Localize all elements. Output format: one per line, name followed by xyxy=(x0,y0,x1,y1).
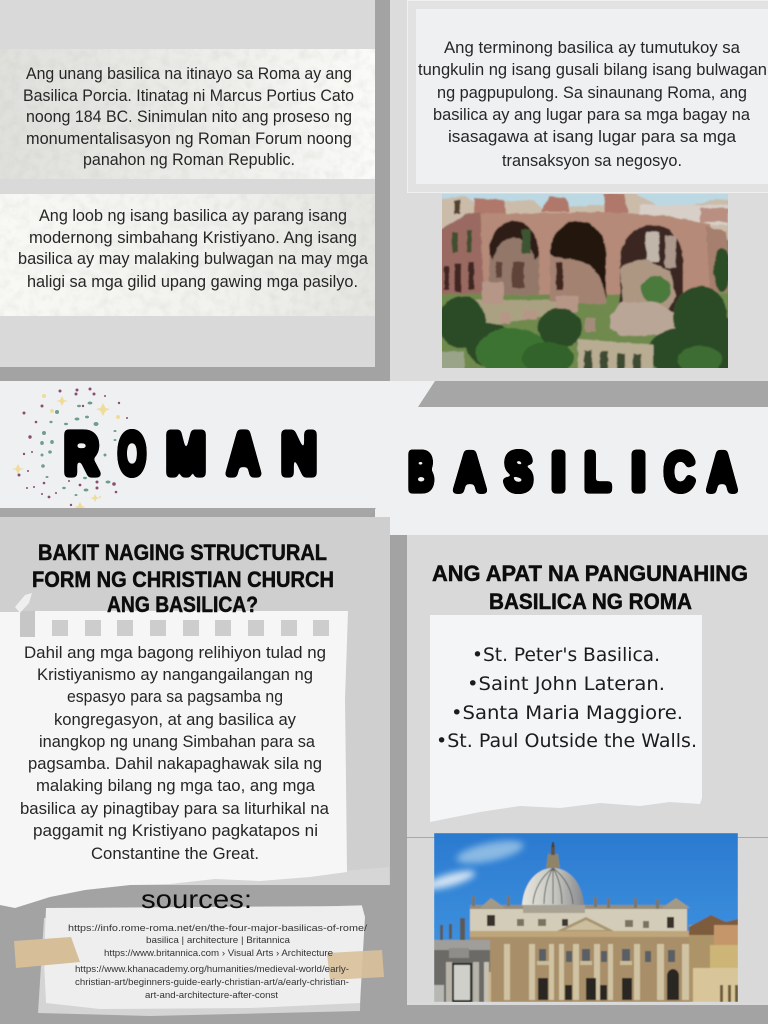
text: basilica interior xyxy=(18,207,369,291)
title: BASILICA: C xyxy=(664,440,695,502)
trees xyxy=(442,284,728,368)
title: BASILICA: A xyxy=(707,440,737,502)
text: source links: christian-art/beginners-guide-early-christian-art/a/early-christian- xyxy=(75,977,349,988)
text: list of four basilicas: •St. Peter's Basilica. xyxy=(472,644,660,666)
title: BASILICA: I xyxy=(551,440,566,502)
title: ROMAN xyxy=(64,421,317,487)
panel: parallelogram accent xyxy=(418,381,768,407)
text: why the basilica became the church form: espasyo para sa pagsamba ng xyxy=(67,688,283,706)
heading: why basilica: FORM NG CHRISTIAN CHURCH xyxy=(32,567,334,592)
decoration: confetti burst xyxy=(12,388,128,508)
tape left xyxy=(14,937,80,968)
text: why the basilica became the church form: malaking bilang ng mga tao, ang mga xyxy=(36,777,316,795)
dome xyxy=(522,868,584,905)
arch three xyxy=(620,225,683,314)
title: BASILICA: S xyxy=(504,440,533,502)
heading: four major basilicas: ANG APAT NA PANGUNAHING xyxy=(432,561,748,586)
title: ROMAN: O xyxy=(118,421,146,487)
text: why the basilica became the church form: kongregasyon, at ang basilica ay xyxy=(54,711,297,729)
arch two xyxy=(550,222,606,304)
title: BASILICA: I xyxy=(631,440,646,502)
text: definition of basilica: Ang terminong basilica ay tumutukoy sa xyxy=(444,39,741,57)
text: basilica interior: modernong simbahang Kristiyano. Ang isang xyxy=(29,229,357,247)
text: why the basilica became the church form xyxy=(20,644,330,863)
photo: St. Peter's Basilica xyxy=(423,833,738,1002)
right buildings xyxy=(688,924,715,1002)
text: definition of basilica: transaksyon sa negosyo. xyxy=(502,152,682,170)
text: why the basilica became the church form: Dahil ang mga bagong relihiyon tulad ng xyxy=(24,644,326,662)
text: why the basilica became the church form: Kristiyanismo ay nangangailangan ng xyxy=(37,666,313,684)
text: source links: https://www.khanacademy.org/humanities/medieval-world/early- xyxy=(75,964,349,975)
ruin blocks xyxy=(482,282,578,324)
title: BASILICA xyxy=(408,440,737,502)
panel: sources paper xyxy=(14,905,384,1016)
text: source links xyxy=(68,923,367,1001)
text: Basilica Porcia: noong 184 BC. Sinimulan nito ang proseso ng xyxy=(26,108,352,126)
heading: four major basilicas xyxy=(432,561,748,614)
heading: four major basilicas: BASILICA NG ROMA xyxy=(489,589,692,614)
text: basilica interior: basilica ay may malaking bulwagan na may mga xyxy=(18,250,369,268)
panel: lower right background xyxy=(407,535,768,1005)
panel: torn note paper xyxy=(0,593,389,908)
facade xyxy=(470,931,690,1002)
panel: basilica list paper xyxy=(430,615,702,822)
title: BASILICA: B xyxy=(408,440,434,502)
panel: top left background xyxy=(0,0,375,367)
note paper tab xyxy=(20,611,35,637)
text: list of four basilicas: •Santa Maria Maggiore. xyxy=(451,702,683,724)
text: source links: art-and-architecture-after-const xyxy=(145,990,278,1001)
text: Basilica Porcia: Ang unang basilica na itinayo sa Roma ay ang xyxy=(26,65,352,83)
arch one xyxy=(488,236,540,296)
tape right xyxy=(327,950,384,980)
title: BASILICA: L xyxy=(584,440,611,502)
text: why the basilica became the church form: basilica ay pinagtibay para sa liturhikal na xyxy=(20,800,330,818)
main wall xyxy=(476,212,716,294)
heading: why basilica: ANG BASILICA? xyxy=(107,592,258,617)
upper walls xyxy=(474,193,628,214)
panel: top right background xyxy=(390,0,768,381)
title: ROMAN: R xyxy=(64,421,99,487)
text: source links: https://info.rome-roma.net/en/the-four-major-basilicas-of-rome/ xyxy=(68,923,367,934)
text: source links: basilica | architecture | Britannica xyxy=(146,935,291,946)
text: why the basilica became the church form: pagsamba. Dahil nakapaghawak sila ng xyxy=(28,755,322,773)
text: why the basilica became the church form: inangkop ng unang Simbahan para sa xyxy=(39,733,316,751)
attic xyxy=(470,908,687,934)
text: basilica interior: haligi sa mga gilid upang gawing mga pasilyo. xyxy=(27,273,358,291)
panel: definition card xyxy=(408,0,768,192)
title: ROMAN: A xyxy=(227,421,260,487)
text: definition of basilica: ng pagpupulong. Sa sinaunang Roma, ang xyxy=(437,84,747,102)
panel: slanted strip under title xyxy=(0,508,376,517)
panel: second fact card xyxy=(0,194,375,316)
panel: lower left background xyxy=(0,517,390,885)
photo: Basilica of Maxentius ruins xyxy=(442,194,728,368)
text: list of four basilicas: •Saint John Lateran. xyxy=(467,673,665,695)
text: Basilica Porcia: Basilica Porcia. Itinatag ni Marcus Portius Cato xyxy=(23,87,354,105)
heading: sources: sources: xyxy=(141,884,252,914)
panel: title band xyxy=(0,381,768,535)
text: Basilica Porcia xyxy=(23,65,354,169)
panel: first fact card xyxy=(0,49,375,179)
text: definition of basilica: basilica ay ang lugar para sa mga bagay na xyxy=(433,106,751,124)
text: Basilica Porcia: monumentalisasyon ng Roman Forum noong xyxy=(26,130,352,148)
text: why the basilica became the church form: paggamit ng Kristiyano pagkatapos ni xyxy=(33,822,318,840)
heading: why basilica: BAKIT NAGING STRUCTURAL xyxy=(38,540,327,565)
title: ROMAN: N xyxy=(281,421,317,487)
heading: why basilica xyxy=(32,540,334,617)
left wing openings xyxy=(452,230,472,252)
note paper holes xyxy=(52,620,329,636)
ground xyxy=(442,293,728,368)
left colonnade xyxy=(434,944,490,1002)
text: list of four basilicas: •St. Paul Outside the Walls. xyxy=(436,730,697,752)
text: source links: https://www.britannica.com › Visual Arts › Architecture xyxy=(104,948,333,959)
text: definition of basilica xyxy=(418,39,767,170)
note paper curl xyxy=(15,593,32,613)
text: list of four basilicas xyxy=(436,644,697,752)
skyline xyxy=(436,193,740,240)
text: definition of basilica: isasagawa at isang lugar para sa mga xyxy=(448,128,737,146)
title: BASILICA: A xyxy=(454,440,486,502)
text: definition of basilica: tungkulin ng isang gusali bilang isang bulwagan xyxy=(418,61,767,79)
text: basilica interior: Ang loob ng isang basilica ay parang isang xyxy=(39,207,347,225)
small arcade xyxy=(578,339,653,374)
text: Basilica Porcia: panahon ng Roman Republic. xyxy=(83,151,295,169)
text: why the basilica became the church form: Constantine the Great. xyxy=(91,845,259,863)
title: ROMAN: M xyxy=(166,421,206,487)
